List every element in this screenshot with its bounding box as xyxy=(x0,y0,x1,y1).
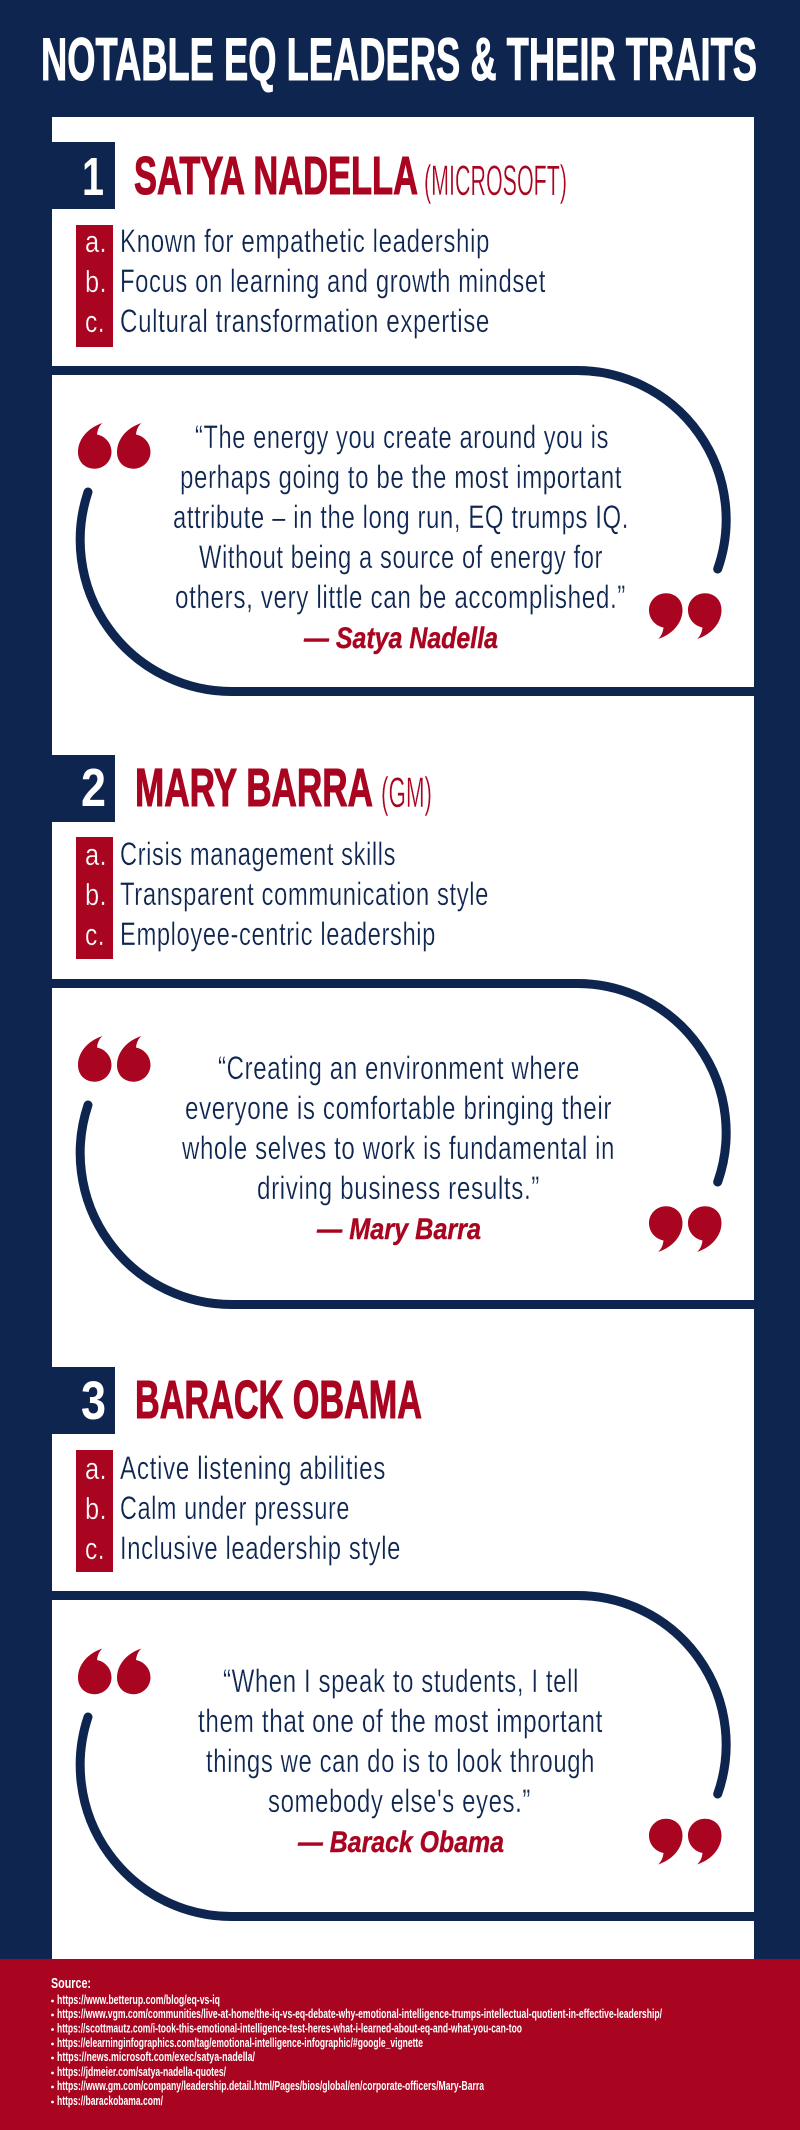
number badge 1: 1 xyxy=(82,147,104,207)
trait list: Focus on learning and growth mindset xyxy=(120,263,546,299)
source heading: Source: xyxy=(51,1976,91,1992)
panel: Barack Obama xyxy=(52,1367,754,1917)
source links xyxy=(57,1993,662,2108)
quote text: driving business results.” xyxy=(257,1170,540,1206)
quote text: whole selves to work is fundamental in xyxy=(181,1130,615,1166)
quote bottom-left curve xyxy=(80,1717,754,1917)
icon: opening quotation marks xyxy=(78,1036,150,1082)
panel: Satya Nadella xyxy=(52,142,754,692)
trait letters: c. xyxy=(85,917,105,952)
trait list: Transparent communication style xyxy=(120,876,489,912)
quote text: everyone is comfortable bringing their xyxy=(185,1090,612,1126)
quote top-right curve xyxy=(52,983,726,1182)
trait letters: c. xyxy=(85,1531,105,1566)
source links: https://jdmeier.com/satya-nadella-quotes/ xyxy=(57,2065,226,2079)
icon: closing quotation marks xyxy=(649,1206,722,1252)
source links: https://news.microsoft.com/exec/satya-nadella/ xyxy=(57,2050,255,2064)
quote top-right curve xyxy=(52,1595,726,1794)
trait letters: a. xyxy=(85,1451,107,1486)
icon: opening quotation marks xyxy=(78,423,150,469)
attribution: — Satya Nadella xyxy=(303,622,498,655)
number badge 3: 3 xyxy=(81,1371,106,1431)
quote text: “When I speak to students, I tell xyxy=(223,1663,579,1699)
trait list xyxy=(120,1450,401,1566)
panel: sources footer xyxy=(0,1959,800,2130)
number badge 2 xyxy=(52,755,115,822)
source links: https://elearninginfographics.com/tag/emotional-intelligence-infographic/#google_vignette xyxy=(57,2036,423,2050)
attribution: — Barack Obama xyxy=(297,1826,504,1859)
quote text: perhaps going to be the most important xyxy=(180,459,622,495)
source links: https://www.betterup.com/blog/eq-vs-iq xyxy=(57,1993,220,2007)
icon: closing quotation marks xyxy=(649,593,722,639)
heading: Satya Nadella: SATYA NADELLA xyxy=(134,146,418,206)
white content panel xyxy=(52,117,754,1959)
number badge 1 xyxy=(52,142,115,209)
trait list: Crisis management skills xyxy=(120,836,396,872)
number badge 3 xyxy=(52,1367,115,1434)
quote text: others, very little can be accomplished.” xyxy=(175,579,626,615)
trait list: Known for empathetic leadership xyxy=(120,223,490,259)
source links: https://scottmautz.com/i-took-this-emotional-intelligence-test-heres-what-i-learned-about-eq-and-what-you-can-too xyxy=(57,2022,522,2036)
quote text: “Creating an environment where xyxy=(218,1050,580,1086)
source links: https://barackobama.com/ xyxy=(57,2094,163,2108)
quote top-right curve xyxy=(52,370,726,569)
source links: https://www.gm.com/company/leadership.detail.html/Pages/bios/global/en/corporate-officers/Mary-Barra xyxy=(57,2079,485,2093)
quote text: them that one of the most important xyxy=(198,1703,603,1739)
number badge 2: 2 xyxy=(81,758,106,818)
attribution: — Mary Barra xyxy=(316,1213,481,1246)
trait letters: b. xyxy=(85,264,107,299)
trait letters: a. xyxy=(85,224,107,259)
trait letters xyxy=(76,224,113,347)
quote text xyxy=(173,419,629,615)
quote text xyxy=(181,1050,615,1206)
icon: opening quotation marks xyxy=(78,1648,150,1694)
trait letters xyxy=(76,1450,113,1572)
quote bottom-left curve xyxy=(80,1105,754,1305)
trait letters: b. xyxy=(85,877,107,912)
source bullets xyxy=(51,2000,54,2103)
trait list: Cultural transformation expertise xyxy=(120,303,490,339)
trait list: Employee-centric leadership xyxy=(120,916,436,952)
panel: Mary Barra xyxy=(52,755,754,1305)
quote text: attribute – in the long run, EQ trumps IQ. xyxy=(173,499,629,535)
trait list xyxy=(120,223,546,339)
quote bottom-left curve xyxy=(80,492,754,692)
quote text: Without being a source of energy for xyxy=(199,539,603,575)
heading: Mary Barra: MARY BARRA xyxy=(135,758,373,818)
quote text: things we can do is to look through xyxy=(206,1743,595,1779)
trait list: Calm under pressure xyxy=(120,1490,350,1526)
quote text: “The energy you create around you is xyxy=(195,419,609,455)
quote text: somebody else's eyes.” xyxy=(268,1783,531,1819)
trait list: Inclusive leadership style xyxy=(120,1530,401,1566)
trait letters: b. xyxy=(85,1491,107,1526)
trait letters xyxy=(76,837,113,959)
trait letters: c. xyxy=(85,304,105,339)
trait list xyxy=(120,836,489,952)
heading: Barack Obama: BARACK OBAMA xyxy=(135,1370,422,1430)
trait list: Active listening abilities xyxy=(120,1450,386,1486)
trait letters: a. xyxy=(85,837,107,872)
icon: closing quotation marks xyxy=(649,1819,722,1864)
panel: Satya Nadella: (MICROSOFT) xyxy=(424,157,567,205)
company: GM: (GM) xyxy=(381,769,432,817)
quote text xyxy=(198,1663,603,1819)
